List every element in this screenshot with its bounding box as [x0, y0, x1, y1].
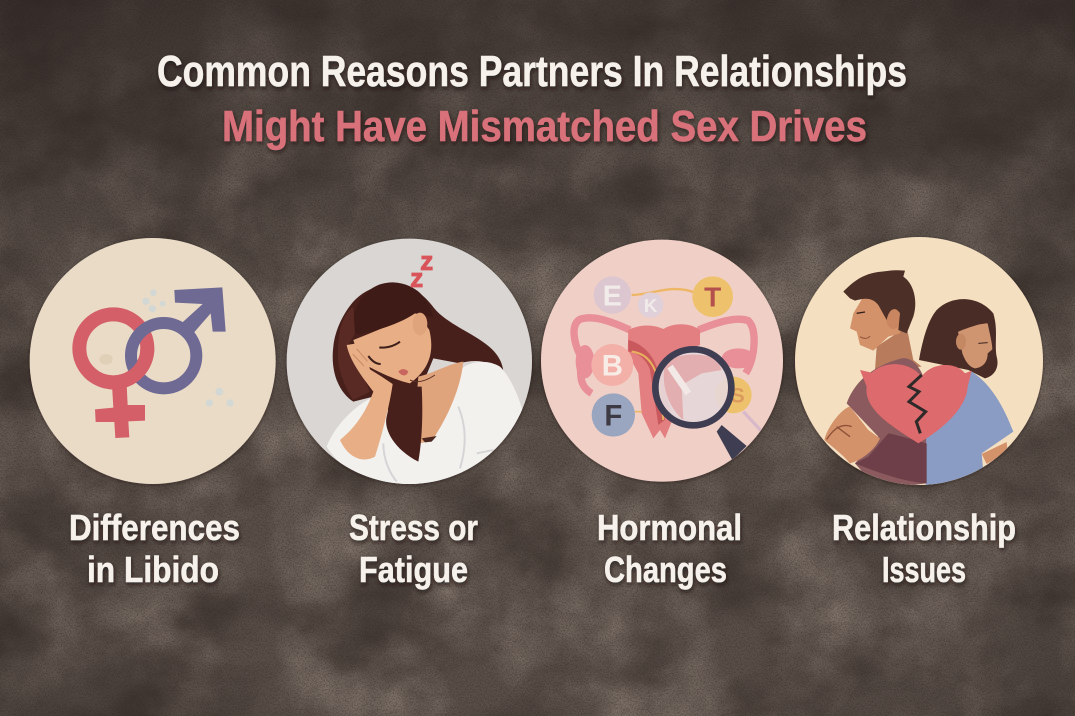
label: differences in libido: Differences — [69, 507, 240, 548]
circle icon: uterus and hormones: K — [644, 295, 658, 316]
label: stress or fatigue: Fatigue — [359, 549, 468, 590]
label: relationship issues: Relationship — [832, 507, 1016, 548]
panel: differences in libido — [30, 238, 276, 590]
circle icon: tired woman: Z — [411, 270, 422, 291]
title — [157, 47, 907, 151]
label: relationship issues: Issues — [882, 549, 966, 590]
circle icon: couple back to back with broken heart — [795, 237, 1043, 490]
circle icon: uterus and hormones — [541, 240, 783, 482]
title: Might Have Mismatched Sex Drives — [222, 102, 867, 151]
circle icon: uterus and hormones: B — [602, 350, 623, 383]
label: stress or fatigue — [349, 507, 478, 590]
panel: stress or fatigue — [287, 239, 532, 590]
panel: hormonal changes — [541, 240, 783, 590]
circle icon: tired woman — [287, 239, 532, 490]
label: stress or fatigue: Stress or — [349, 507, 478, 548]
label: hormonal changes — [597, 507, 742, 590]
circle icon: uterus and hormones: S — [731, 384, 745, 408]
panel: relationship issues — [795, 237, 1043, 590]
circle icon: uterus and hormones: T — [704, 282, 721, 313]
label: hormonal changes: Changes — [604, 549, 727, 590]
circle icon: uterus and hormones: F — [604, 399, 622, 432]
circle icon: gender symbols — [30, 238, 276, 484]
label: hormonal changes: Hormonal — [597, 507, 742, 548]
circle icon: tired woman: Z — [421, 252, 432, 273]
circle icon: uterus and hormones: E — [603, 280, 622, 312]
label: differences in libido: in Libido — [87, 549, 219, 590]
label: relationship issues — [832, 507, 1016, 590]
title: Common Reasons Partners In Relationships — [157, 47, 907, 96]
label: differences in libido — [69, 507, 240, 590]
